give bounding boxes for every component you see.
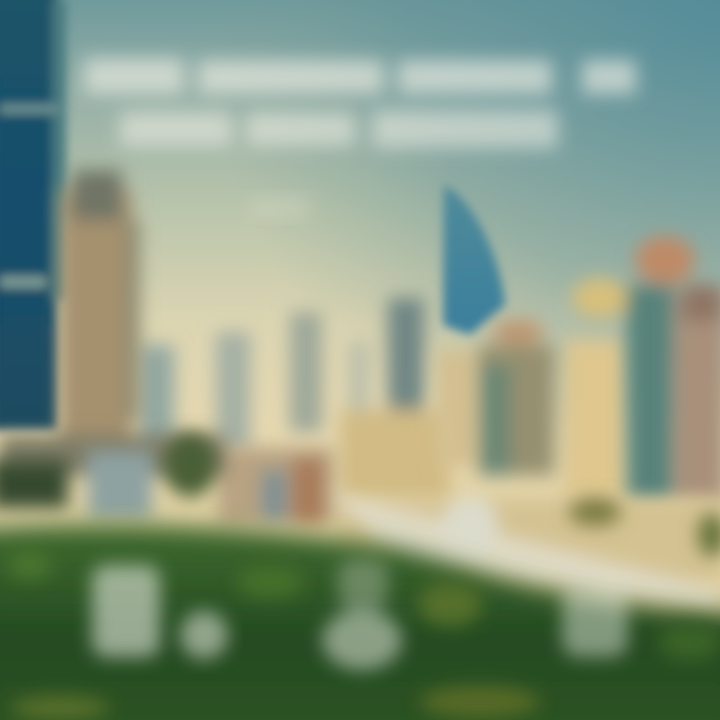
central blue tower (443, 185, 505, 335)
icon: blurred white small round icon (180, 611, 228, 659)
mid-right building (437, 320, 554, 475)
icon: blurred white icon left (92, 565, 160, 657)
icon: blurred white icon centre (322, 560, 402, 670)
low city blocks and street (0, 435, 720, 612)
far background buildings (138, 298, 625, 500)
icon: blurred white icon right (562, 585, 628, 657)
right teal and terracotta towers (572, 236, 720, 500)
trees (0, 433, 720, 557)
foliage highlights (8, 551, 720, 720)
title line two (120, 110, 558, 148)
faint centre caption (250, 196, 310, 218)
left blue glass tower (0, 0, 66, 430)
green foreground foliage (0, 525, 720, 720)
title line one (84, 58, 636, 94)
left tan building (60, 170, 140, 460)
title: illegible blurred white heading (84, 58, 636, 148)
